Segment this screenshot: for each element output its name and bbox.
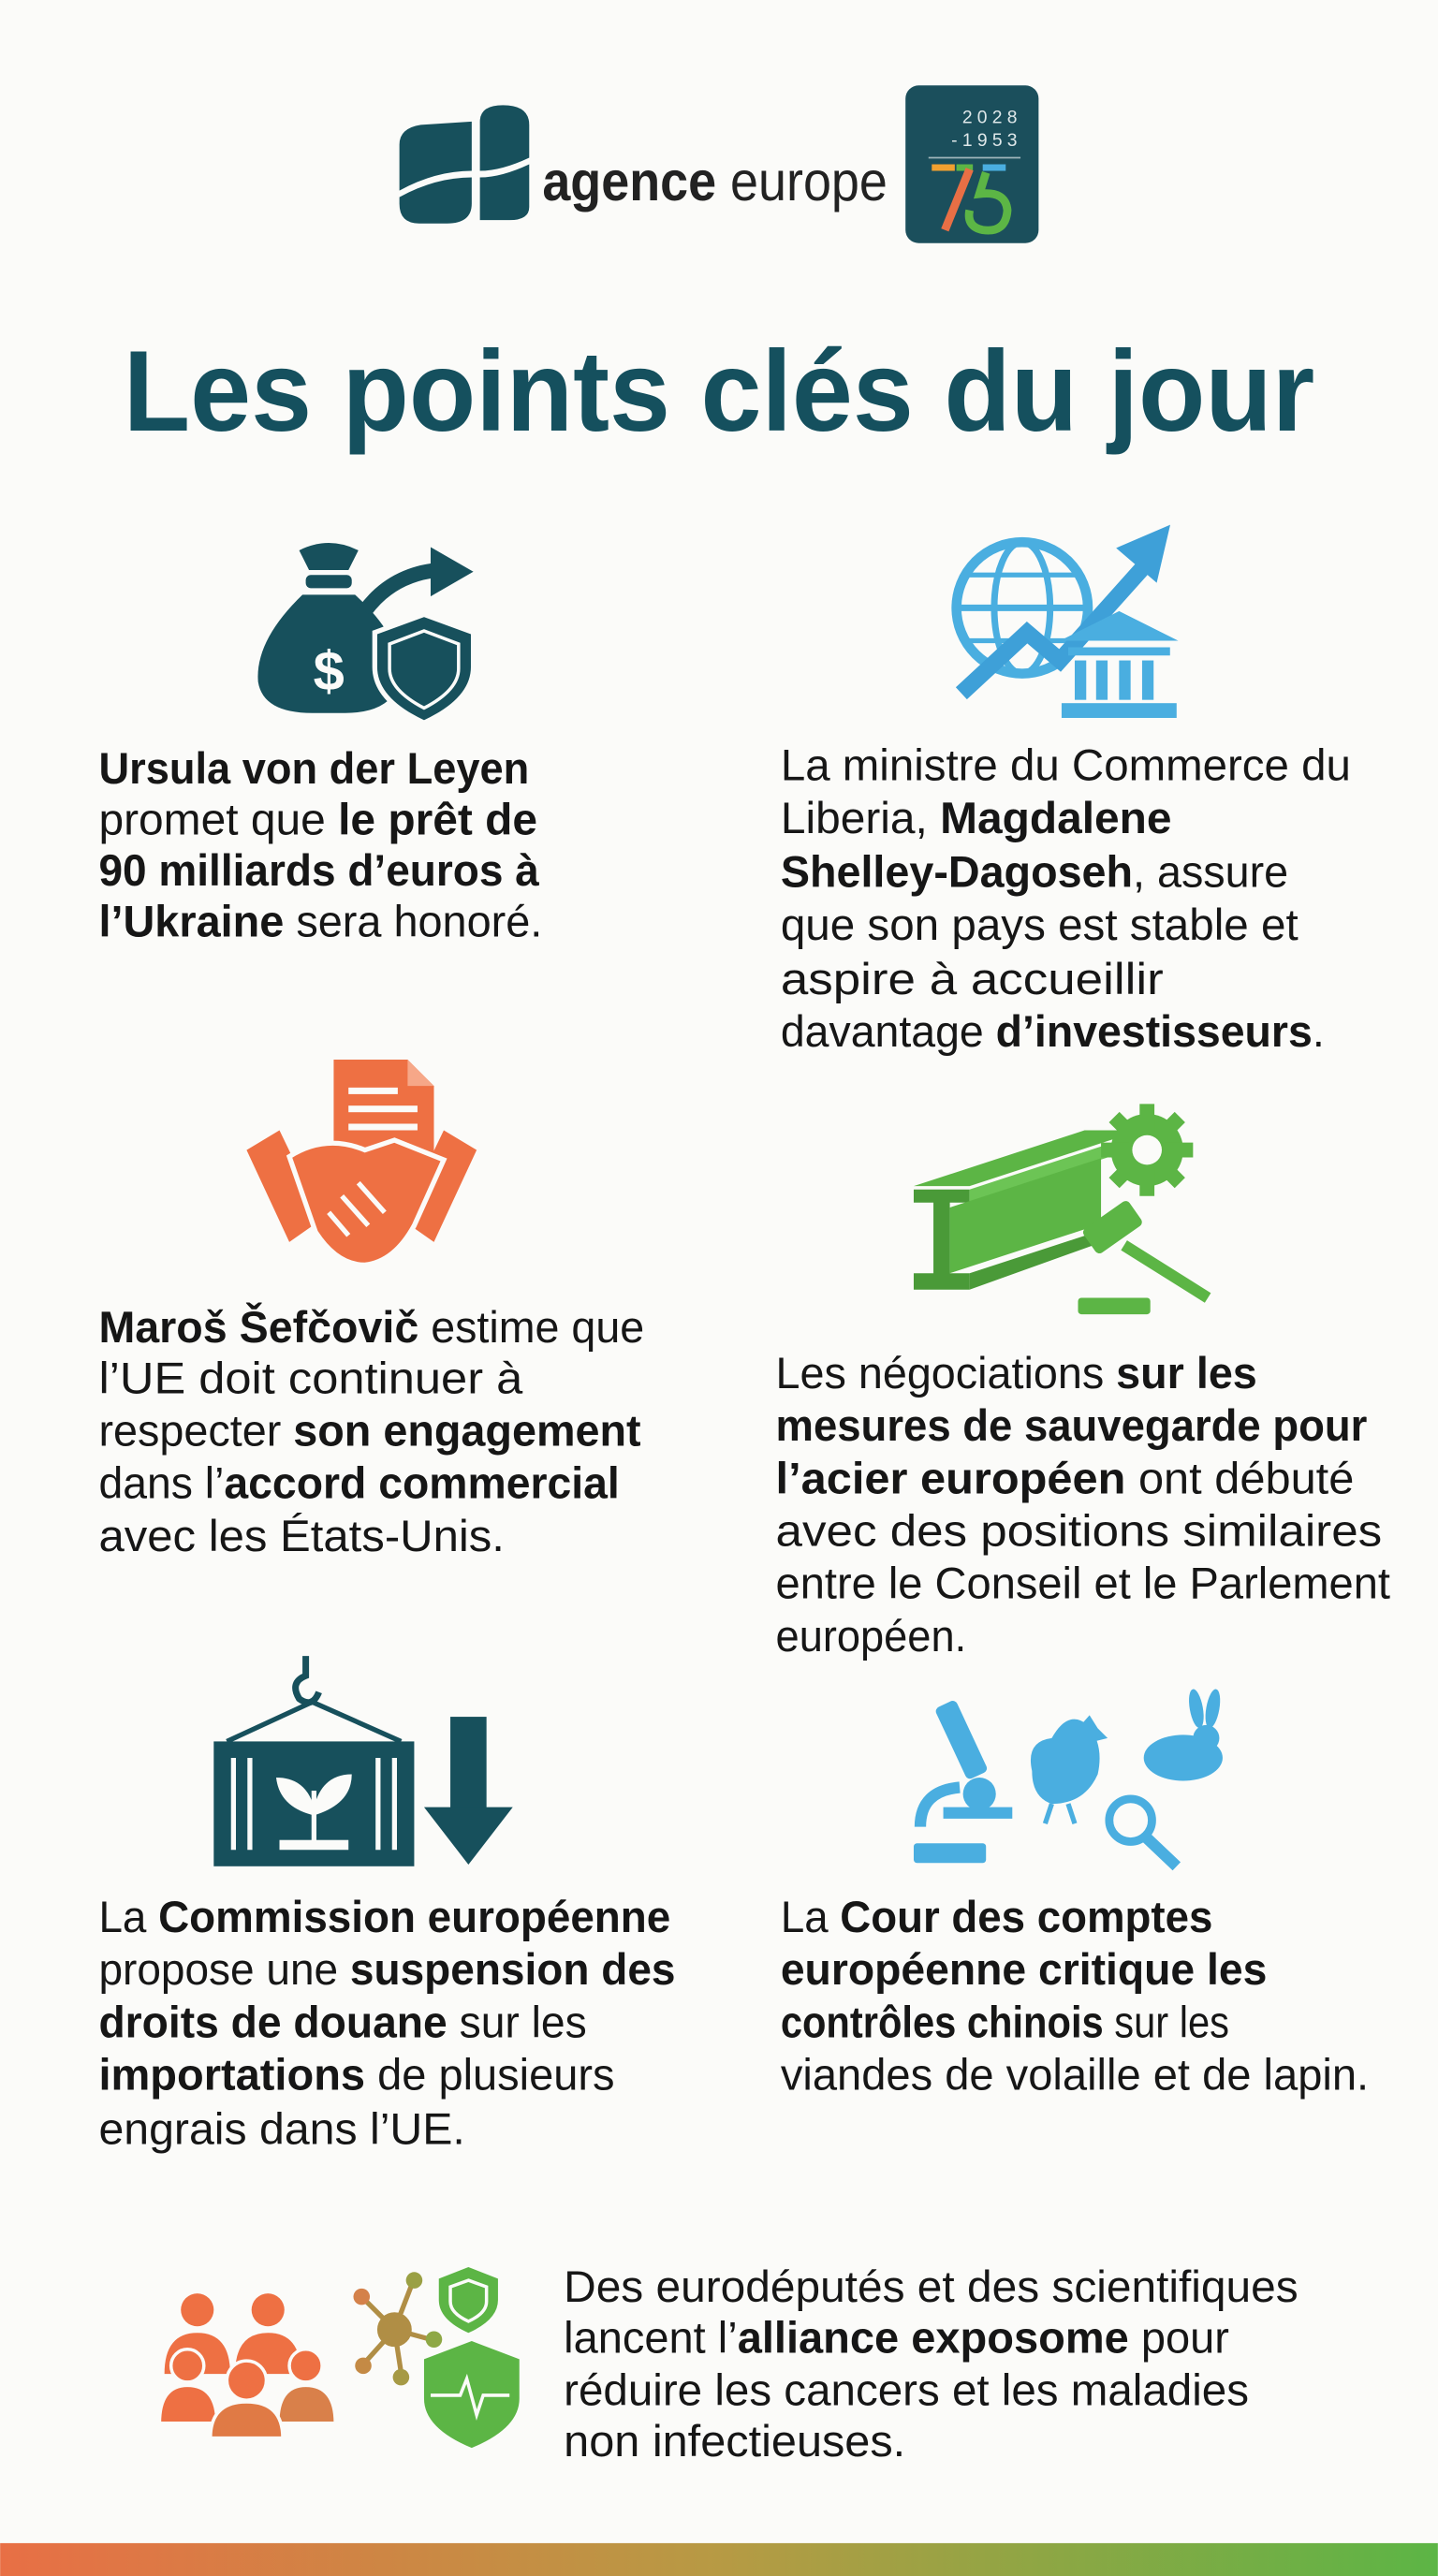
text: Šefčovič: dans l’accord commercial: [98, 1459, 620, 1509]
panel: EU-US trade agreement: [98, 1060, 644, 1561]
text: Liberia: aspire à accueillir: [781, 955, 1164, 1004]
text: Liberia: que son pays est stable et: [781, 900, 1299, 950]
text: steel safeguards: Les négociations sur les: [776, 1349, 1257, 1398]
text: poultry controls: européenne critique les: [781, 1945, 1267, 1995]
text: exposome alliance: non infectieuses.: [564, 2417, 905, 2466]
text: Ukraine loan: promet que le prêt de: [98, 796, 537, 845]
text: customs suspension: [98, 1893, 675, 2154]
text: poultry controls: La Cour des comptes: [781, 1893, 1212, 1942]
logo text: agence europe: [542, 150, 888, 212]
text: exposome alliance: [564, 2262, 1299, 2466]
icon: globe, rising arrow and bank: [957, 529, 1179, 718]
text: steel safeguards: l’acier européen ont débuté: [776, 1454, 1354, 1503]
text: exposome alliance: Des eurodéputés et des scientifiques: [564, 2262, 1299, 2312]
panel: steel safeguards: [776, 1104, 1390, 1661]
panel: exposome alliance: [159, 2262, 1299, 2466]
icon: container with plant and down arrow: [213, 1656, 513, 1866]
text: Ukraine loan: l’Ukraine sera honoré.: [98, 897, 542, 946]
text: Šefčovič: Maroš Šefčovič estime que: [98, 1301, 644, 1353]
icon: steel beam, gear and gavel: [914, 1104, 1208, 1314]
text: customs suspension: La Commission européenne: [98, 1893, 670, 1942]
text: Šefčovič: [98, 1301, 644, 1561]
text: steel safeguards: [776, 1349, 1390, 1661]
text: poultry controls: contrôles chinois sur les: [781, 1998, 1229, 2047]
text: Liberia: La ministre du Commerce du: [781, 741, 1351, 791]
text: customs suspension: importations de plusieurs: [98, 2050, 615, 2100]
text: customs suspension: engrais dans l’UE.: [98, 2104, 465, 2154]
icon: logo mark: [400, 105, 529, 224]
text: Ukraine loan: Ursula von der Leyen: [98, 744, 529, 794]
text: steel safeguards: européen.: [776, 1612, 966, 1661]
text: Ukraine loan: [98, 744, 542, 946]
badge: 75 years: 2028: [962, 109, 1022, 128]
logo: agence europe: [400, 85, 1038, 243]
text: poultry controls: [781, 1893, 1369, 2100]
panel: fertiliser customs suspension: [98, 1656, 675, 2154]
text: customs suspension: propose une suspension des: [98, 1945, 675, 1995]
text: steel safeguards: entre le Conseil et le Parlement: [776, 1559, 1390, 1609]
text: Ukraine loan: 90 milliards d’euros à: [98, 846, 539, 896]
text: steel safeguards: mesures de sauvegarde pour: [776, 1401, 1367, 1451]
badge: 75 years: -1953: [951, 131, 1022, 151]
text: Liberia: davantage d’investisseurs.: [781, 1007, 1325, 1057]
text: exposome alliance: réduire les cancers et les maladies: [564, 2365, 1249, 2415]
icon: people, molecule and health shields: [159, 2267, 520, 2448]
text: exposome alliance: lancent l’alliance exposome pour: [564, 2313, 1229, 2363]
text: customs suspension: droits de douane sur les: [98, 1998, 587, 2047]
text: steel safeguards: avec des positions similaires: [776, 1507, 1382, 1557]
text: Liberia: Shelley-Dagoseh, assure: [781, 848, 1288, 898]
bottom gradient bar: [0, 2543, 1438, 2576]
icon: money bag with shield and arrow: [257, 543, 474, 723]
panel: Court of Auditors poultry: [781, 1688, 1369, 2100]
text: Šefčovič: l’UE doit continuer à: [98, 1354, 523, 1403]
icon: microscope, chicken, rabbit, magnifier: [914, 1688, 1223, 1866]
panel: Ukraine loan: [98, 543, 542, 946]
icon: money bag with shield and arrow: $: [314, 639, 345, 702]
panel: Liberia: [781, 529, 1351, 1057]
badge: 75 years: [905, 85, 1038, 243]
text: Liberia: Liberia, Magdalene: [781, 794, 1172, 843]
icon: handshake with document: [246, 1060, 477, 1265]
text: Šefčovič: avec les États-Unis.: [98, 1512, 505, 1561]
text: poultry controls: viandes de volaille et de lapin.: [781, 2050, 1369, 2100]
text: Liberia: [781, 741, 1351, 1057]
text: Šefčovič: respecter son engagement: [98, 1406, 641, 1456]
title: Les points clés du jour: [124, 328, 1314, 456]
